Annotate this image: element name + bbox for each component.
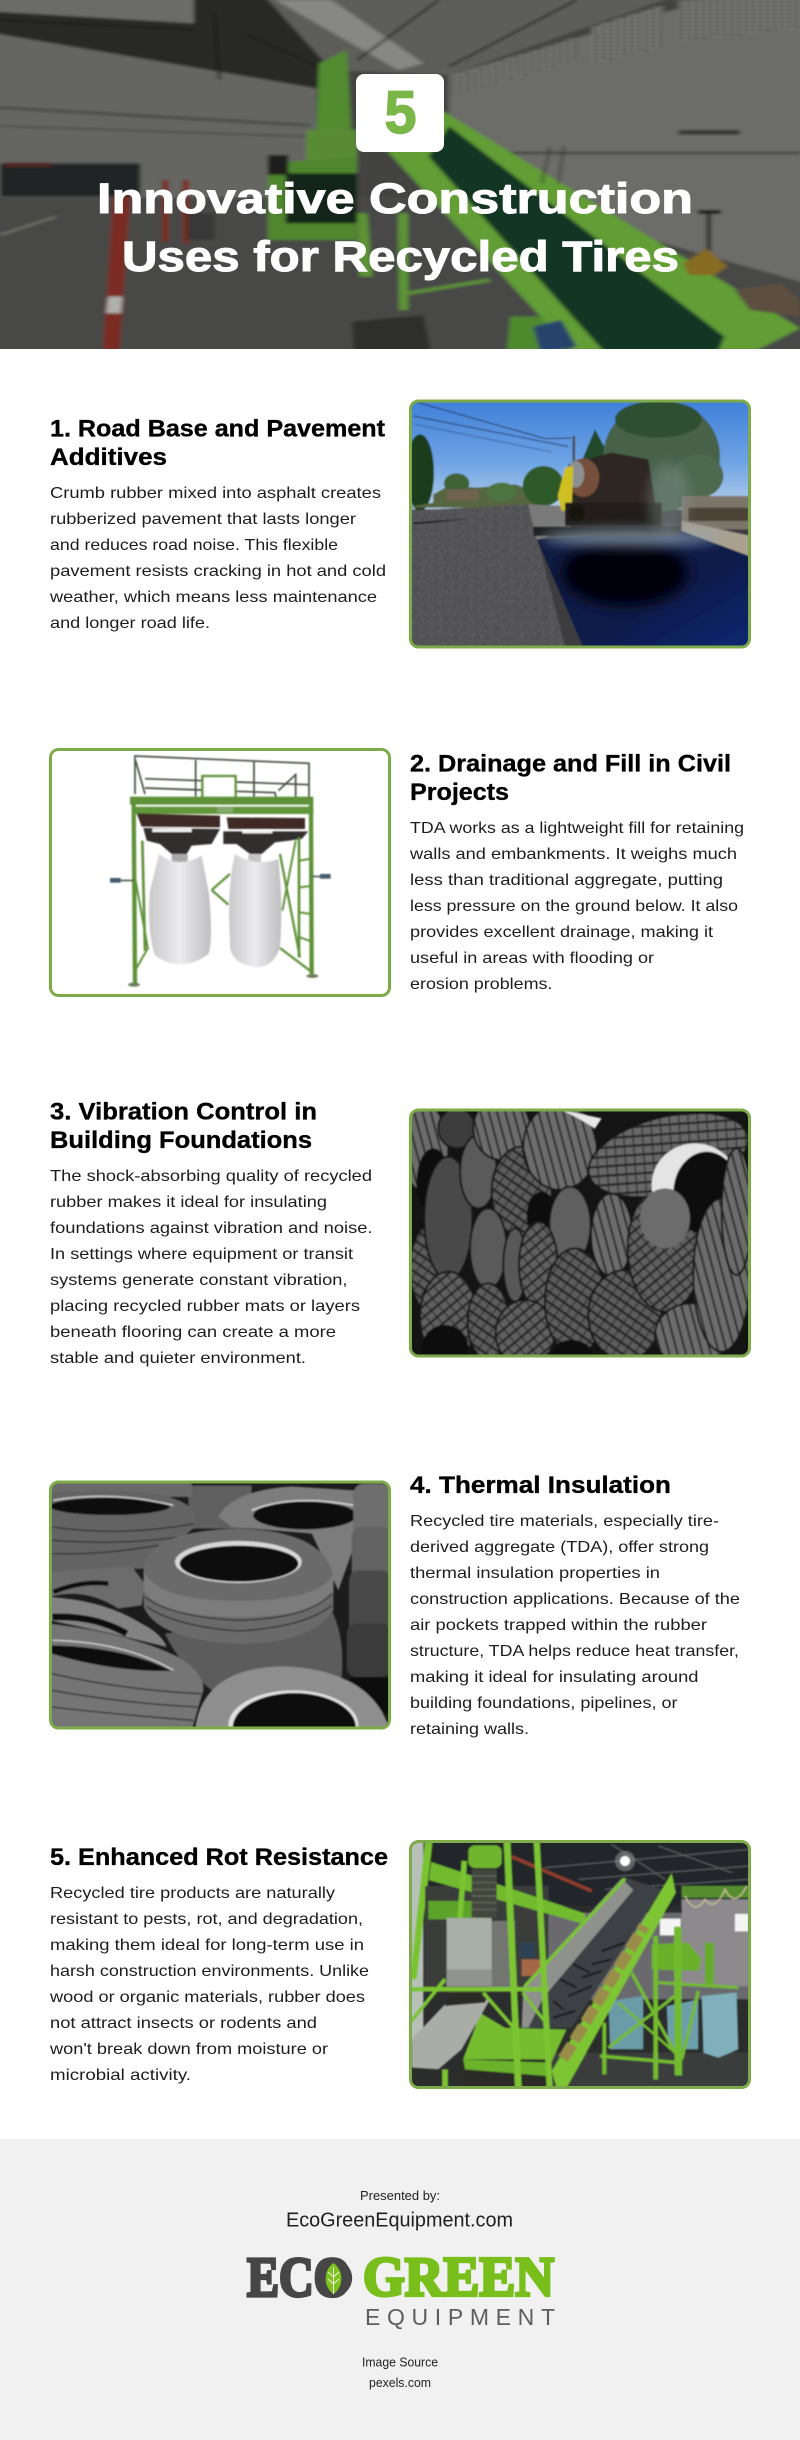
body text 3: systems generate constant vibration, (50, 1272, 348, 1289)
tire F below center (165, 1610, 342, 1690)
number badge: 5 (384, 79, 416, 146)
body text 2: walls and embankments. It weighs much (409, 846, 737, 863)
body text 1 (49, 485, 386, 632)
photo: bulk bag filling station (50, 749, 390, 996)
right structure (702, 1993, 738, 2058)
tire E center (144, 1529, 333, 1644)
left (410, 1841, 423, 2043)
machine (316, 50, 352, 143)
body text 4 (410, 1513, 740, 1738)
hero banner (0, 0, 800, 367)
body text 2: erosion problems. (410, 976, 552, 993)
body text 4: derived aggregate (TDA), offer strong (410, 1539, 709, 1556)
title: Uses for Recycled Tires (122, 233, 679, 281)
body text 5: Recycled tire products are naturally (50, 1885, 335, 1902)
panel: drainage and fill (50, 749, 744, 996)
hero dark tint (0, 0, 800, 349)
body text 4: construction applications. Because of the (410, 1591, 740, 1608)
body text 2: TDA works as a lightweight fill for retaining (410, 820, 744, 837)
body text 2: useful in areas with flooding or (410, 950, 655, 967)
body text 3: In settings where equipment or transit (50, 1246, 354, 1263)
heading 1: Additives (50, 444, 167, 471)
heading 5: 5. Enhanced Rot Resistance (50, 1844, 388, 1871)
image source credit: pexels.com (369, 2376, 431, 2390)
tire G left (50, 1566, 145, 1609)
heading 2 (410, 750, 731, 806)
image source credit (362, 2356, 438, 2390)
vertical beams (410, 1841, 550, 2089)
tire I (50, 1624, 203, 1730)
body text 5: harsh construction environments. Unlike (50, 1963, 369, 1980)
right stack (352, 1484, 388, 1530)
body text 4: thermal insulation properties in (410, 1565, 660, 1582)
logo: Eco Green Equipment (247, 2246, 555, 2330)
body text 3: stable and quieter environment. (50, 1350, 306, 1367)
body text 1: and reduces road noise. This flexible (50, 537, 338, 554)
heading 2: 2. Drainage and Fill in Civil (410, 750, 731, 778)
body text 3: foundations against vibration and noise. (50, 1220, 372, 1237)
panel: vibration control (50, 1097, 757, 1372)
body text 4: air pockets trapped within the rubber (410, 1617, 708, 1634)
panel: enhanced rot resistance (49, 1836, 755, 2089)
heading 3: Building Foundations (50, 1127, 312, 1154)
footer panel (0, 2139, 800, 2440)
body text 2 (409, 820, 744, 993)
panel: road base and pavement additives (49, 393, 758, 659)
body text 5: won't break down from moisture or (49, 2041, 329, 2058)
logo: Eco Green Equipment: ECO (247, 2247, 351, 2309)
tire H (50, 1597, 167, 1647)
icon: leaf (326, 2263, 341, 2294)
logo: Eco Green Equipment: EQUIPMENT (365, 2304, 555, 2330)
tire J (350, 1677, 392, 1714)
body text 3: placing recycled rubber mats or layers (50, 1298, 360, 1315)
tire C (218, 1486, 355, 1590)
hero photo: conveyor in warehouse (0, 0, 800, 367)
body text 1: pavement resists cracking in hot and cold (50, 563, 386, 580)
chute (412, 1999, 490, 2069)
heading 1: 1. Road Base and Pavement (50, 416, 385, 442)
conveyor frame (552, 1873, 676, 2088)
body text 1: and longer road life. (50, 615, 210, 632)
presented by label: Presented by: (360, 2188, 440, 2203)
photo: green tire recycling plant (405, 1836, 755, 2089)
image source credit: Image Source (362, 2356, 438, 2370)
photo: stacked tires close-up (409, 1108, 751, 1358)
body text 4: retaining walls. (410, 1721, 529, 1738)
hopper (462, 2013, 568, 2062)
body text 5: making them ideal for long-term use in (50, 1937, 364, 1954)
body text 5: wood or organic materials, rubber does (49, 1989, 365, 2006)
body text 4: making it ideal for insulating around (410, 1669, 698, 1686)
title (97, 175, 693, 281)
heading 2: Projects (410, 779, 509, 806)
heading 4: 4. Thermal Insulation (410, 1472, 671, 1499)
body text 5 (49, 1885, 369, 2084)
panel: thermal insulation (50, 1472, 740, 1762)
conveyor (388, 112, 800, 367)
body text 2: less than traditional aggregate, putting (410, 872, 723, 889)
website: EcoGreenEquipment.com (286, 2210, 513, 2232)
heading 3 (50, 1098, 317, 1154)
body text 2: provides excellent drainage, making it (410, 924, 714, 941)
body text 5: microbial activity. (50, 2067, 191, 2084)
body text 4: structure, TDA helps reduce heat transfer, (410, 1643, 739, 1660)
body text 3: The shock-absorbing quality of recycled (50, 1168, 372, 1185)
heading 3: 3. Vibration Control in (50, 1098, 317, 1126)
bollards (102, 197, 130, 367)
body text 3 (50, 1168, 372, 1367)
heading 1 (50, 416, 385, 471)
body text 4: Recycled tire materials, especially tire- (410, 1513, 719, 1530)
body text 5: not attract insects or rodents and (50, 2015, 317, 2032)
conveyor belt (522, 1878, 662, 2028)
body text 5: resistant to pests, rot, and degradation, (50, 1911, 363, 1928)
right props (707, 211, 711, 256)
logo: Eco Green Equipment: GREEN (363, 2246, 554, 2308)
body text 4: building foundations, pipelines, or (410, 1695, 678, 1712)
photo: asphalt paving truck (409, 400, 751, 648)
title: Innovative Construction (97, 175, 693, 223)
body text 2: less pressure on the ground below. It also (410, 898, 738, 915)
tire A (50, 1490, 195, 1572)
number badge (356, 74, 444, 152)
body text 1: rubberized pavement that lasts longer (50, 511, 357, 528)
body text 3: rubber makes it ideal for insulating (50, 1194, 327, 1211)
body text 1: Crumb rubber mixed into asphalt creates (50, 485, 381, 502)
body text 1: weather, which means less maintenance (49, 589, 377, 606)
body text 3: beneath flooring can create a more (50, 1324, 336, 1341)
photo: pile of used tires (49, 1480, 391, 1730)
